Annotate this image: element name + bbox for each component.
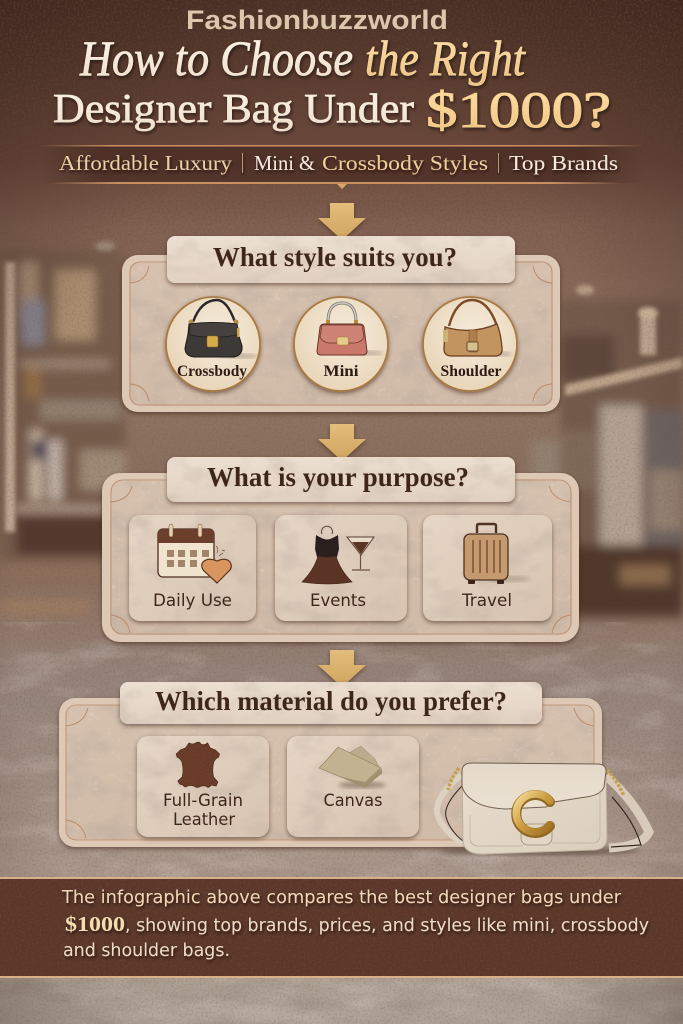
title: the Right [365, 30, 526, 86]
footer text: $1000 [65, 912, 125, 936]
illustration: cream designer bag with gold C [437, 763, 649, 856]
card: events [275, 515, 407, 621]
card: leather: Full-Grain [163, 791, 243, 810]
panel: style [122, 236, 560, 412]
brand name: Fashionbuzzworld [186, 5, 448, 35]
icon: folded canvas [319, 746, 386, 788]
arrow 3 [318, 650, 366, 687]
heading: purpose [167, 457, 515, 502]
card: leather [137, 736, 269, 837]
title [53, 30, 611, 139]
heading: purpose: What is your purpose? [207, 462, 469, 492]
panel: material [59, 682, 602, 847]
subtitle ribbon: Top Brands [509, 151, 618, 175]
option: mini [294, 297, 388, 391]
heading: material: Which material do you prefer? [155, 686, 507, 716]
card: travel: Travel [461, 591, 512, 610]
icon: leather hide [176, 742, 220, 787]
option: mini: Mini [324, 363, 359, 380]
option: shoulder: Shoulder [440, 363, 502, 380]
footer text: and shoulder bags. [63, 941, 230, 961]
heading: style: What style suits you? [213, 242, 457, 272]
subtitle ribbon [40, 145, 645, 189]
arrow 1 [318, 203, 366, 240]
heading: style [167, 236, 515, 283]
card: canvas: Canvas [324, 791, 382, 810]
title: How to Choose [79, 30, 353, 86]
panel: purpose [102, 457, 579, 642]
footer band [0, 877, 683, 978]
option: crossbody: Crossbody [177, 363, 247, 380]
footer text [61, 888, 649, 961]
title: $1000? [426, 83, 611, 139]
subtitle ribbon: Affordable Luxury [59, 151, 233, 175]
footer text: , showing top brands, prices, and styles like mini, crossbody [125, 916, 649, 936]
icon: calendar with heart [158, 524, 231, 583]
arrow 2 [318, 424, 366, 461]
option: shoulder [423, 297, 517, 391]
card: daily use: Daily Use [153, 591, 232, 610]
card: daily use [129, 515, 256, 621]
subtitle ribbon: Crossbody Styles [322, 151, 488, 175]
icon: suitcase [464, 524, 530, 584]
footer text: The infographic above compares the best designer bags under [61, 888, 622, 908]
icon: dress and glass [302, 526, 374, 584]
option: crossbody [166, 297, 260, 391]
heading: material [120, 682, 542, 724]
title: Designer Bag Under [53, 85, 414, 131]
card: events: Events [310, 591, 366, 610]
card: canvas [287, 736, 419, 837]
card: travel [423, 515, 552, 621]
subtitle ribbon: Mini & [254, 151, 315, 175]
card: leather: Leather [173, 810, 235, 829]
